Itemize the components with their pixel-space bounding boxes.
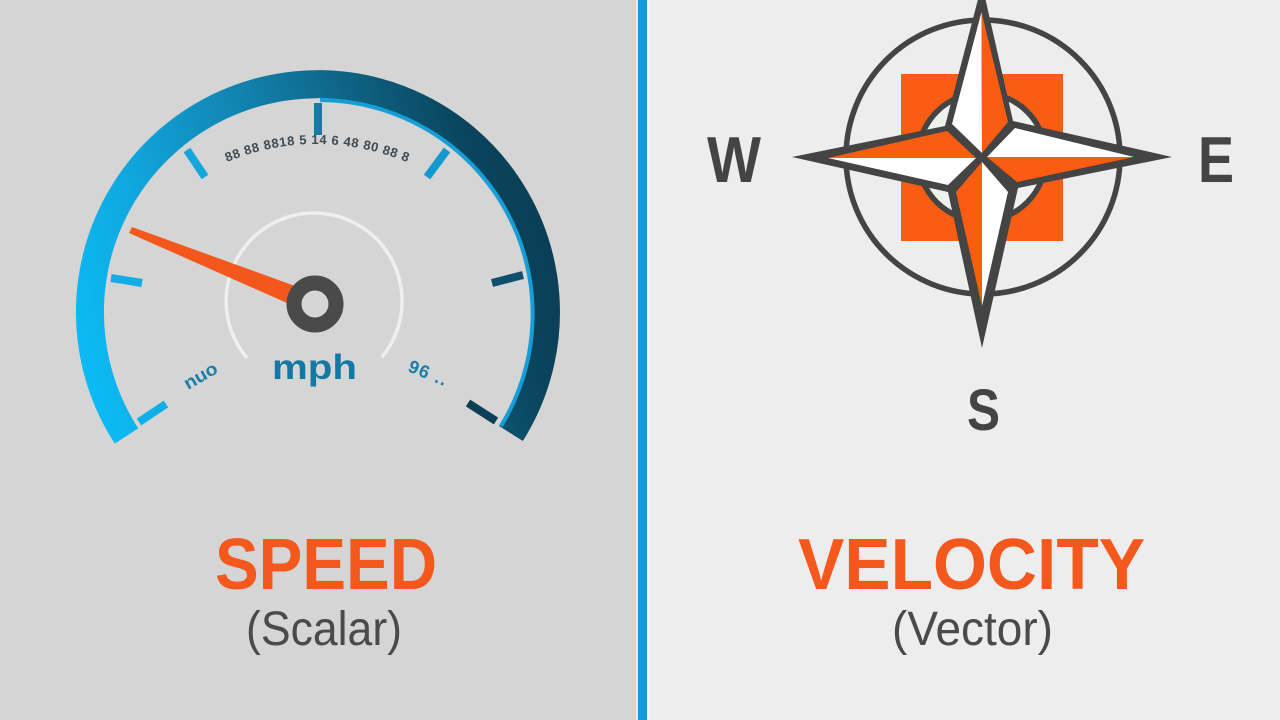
- compass label: south: S: [967, 378, 1000, 443]
- gauge right label: 96 ..: [406, 356, 450, 390]
- needle: [129, 227, 295, 303]
- compass star outline: [792, 0, 1172, 348]
- divider line: [638, 0, 647, 720]
- unit label: mph: mph: [272, 348, 357, 387]
- speedometer gauge: [76, 70, 560, 444]
- subheading: scalar: (Scalar): [246, 603, 402, 656]
- north arm: [952, 12, 1008, 153]
- gauge left label: nuo: [180, 358, 221, 393]
- subheading: vector: (Vector): [892, 603, 1053, 656]
- west arm: [828, 131, 976, 185]
- inner white dial arc: [226, 213, 402, 358]
- gauge top scale numbers: 88 88 8818 5 14 6 48 80 88 8: [225, 135, 410, 162]
- gauge outer arc: [90, 84, 546, 436]
- compass inner ring: [918, 93, 1046, 221]
- compass outer ring: [846, 20, 1120, 294]
- east arm: [987, 128, 1134, 182]
- compass label: west: W: [707, 123, 762, 196]
- south arm: [956, 162, 1008, 306]
- gauge inner highlight arc: [320, 100, 533, 426]
- compass orange square: [901, 74, 1063, 241]
- compass label: east: E: [1198, 123, 1234, 196]
- needle hub: [294, 283, 336, 325]
- heading: velocity: VELOCITY: [798, 525, 1145, 605]
- heading: speed: SPEED: [215, 525, 437, 605]
- compass rose: [792, 0, 1172, 348]
- panel: velocity background: [646, 0, 1280, 720]
- gauge tick marks: [111, 103, 523, 422]
- panel: speed background: [0, 0, 638, 720]
